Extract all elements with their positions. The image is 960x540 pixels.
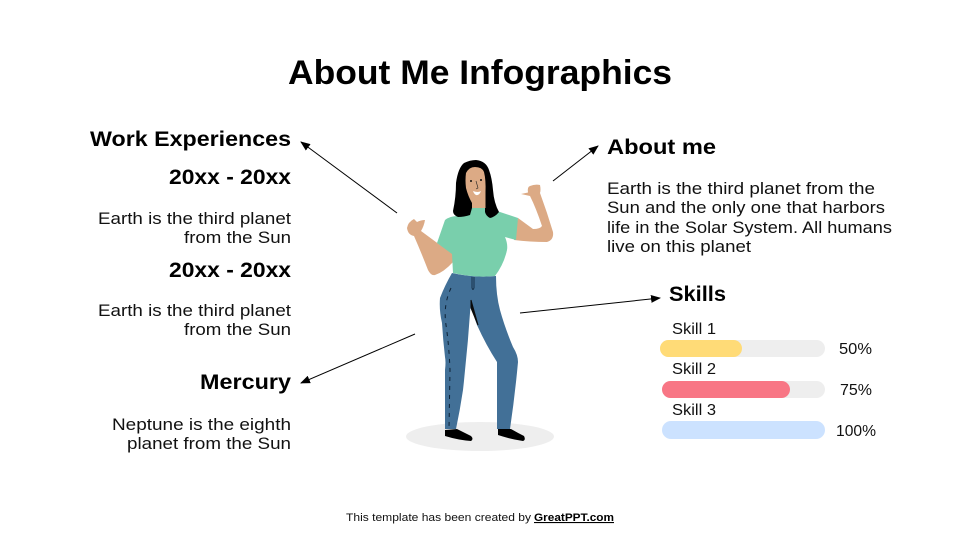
panel: work experiences bbox=[90, 128, 291, 339]
title: About Me Infographics bbox=[288, 54, 672, 92]
heading: mercury: Mercury bbox=[200, 371, 291, 394]
skill 1 bar: 50% bbox=[839, 341, 872, 358]
text block: mercury description bbox=[112, 416, 291, 453]
text block: about me description: live on this planet bbox=[607, 238, 751, 256]
shirt bbox=[437, 208, 518, 277]
skill 3 bar: 100% bbox=[836, 423, 876, 440]
arrow: to skills bbox=[520, 298, 660, 313]
text block: about me description bbox=[607, 180, 892, 256]
hair bbox=[453, 160, 499, 218]
date: first period: 20xx - 20xx bbox=[169, 166, 291, 189]
text block: first experience: from the Sun bbox=[184, 229, 291, 247]
panel: mercury bbox=[112, 371, 291, 453]
skill 3 bar bbox=[662, 402, 876, 440]
text block: second experience: Earth is the third planet bbox=[98, 302, 291, 320]
shoes bbox=[445, 429, 525, 441]
text block: mercury description: planet from the Sun bbox=[127, 435, 291, 453]
arrow: to work experiences bbox=[301, 142, 397, 213]
jeans shadow and stitching bbox=[445, 277, 478, 428]
panel: about me bbox=[607, 136, 892, 256]
skill 2 bar bbox=[662, 361, 872, 399]
left arm and hand bbox=[407, 219, 453, 275]
text block: about me description: life in the Solar System. All humans bbox=[607, 219, 892, 237]
jeans bbox=[440, 273, 518, 429]
text block: about me description: Earth is the third planet from the bbox=[607, 180, 875, 198]
date: second period: 20xx - 20xx bbox=[169, 259, 291, 282]
text block: about me description: Sun and the only one that harbors bbox=[607, 199, 885, 217]
skill 1 bar bbox=[660, 321, 872, 358]
text block: second experience: from the Sun bbox=[184, 321, 291, 339]
skill 2 bar: 75% bbox=[840, 382, 872, 399]
heading: about me: About me bbox=[607, 136, 716, 159]
right arm and hand bbox=[514, 185, 553, 242]
heading: work experiences: Work Experiences bbox=[90, 128, 291, 151]
panel: skills bbox=[660, 283, 876, 440]
text block: second experience bbox=[98, 302, 291, 339]
skill 2 bar: Skill 2 bbox=[672, 361, 716, 378]
text block: first experience bbox=[98, 210, 291, 247]
footer credit: This template has been created by bbox=[346, 512, 532, 524]
illustration: woman pointing at herself bbox=[406, 160, 554, 451]
text block: mercury description: Neptune is the eighth bbox=[112, 416, 291, 434]
face and neck bbox=[466, 167, 486, 208]
skill 1 bar: Skill 1 bbox=[672, 321, 716, 338]
heading: skills: Skills bbox=[669, 283, 726, 306]
arrow: to mercury bbox=[301, 334, 415, 383]
footer credit bbox=[346, 512, 614, 524]
arrow: to about me bbox=[553, 146, 598, 181]
footer credit: GreatPPT.com bbox=[534, 512, 614, 524]
text block: first experience: Earth is the third planet bbox=[98, 210, 291, 228]
skill 3 bar: Skill 3 bbox=[672, 402, 716, 419]
ground shadow bbox=[406, 422, 554, 451]
facial features bbox=[470, 179, 482, 195]
